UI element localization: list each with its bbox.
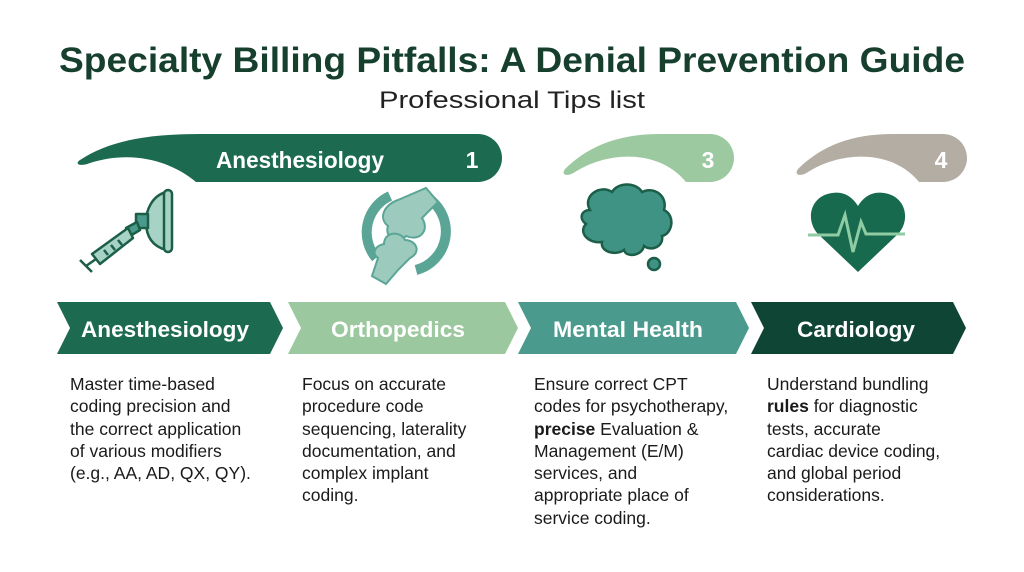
arrow: Cardiology xyxy=(751,302,966,354)
icon: orthopedic joint xyxy=(367,188,446,284)
text: Cardiology tip xyxy=(767,374,940,505)
arrow: Anesthesiology xyxy=(57,302,283,354)
text: Orthopedics tip xyxy=(302,374,467,505)
text: Cardiology tip: cardiac device coding, xyxy=(767,441,940,461)
text: Anesthesiology tip: the correct application xyxy=(70,419,241,439)
banner 4 xyxy=(797,134,967,182)
text: Anesthesiology tip: (e.g., AA, AD, QX, QY). xyxy=(70,463,251,483)
arrow: Mental Health xyxy=(518,302,749,354)
text: Orthopedics tip: procedure code xyxy=(302,396,424,416)
banner 3: 3 xyxy=(702,147,714,173)
arrow: Orthopedics xyxy=(288,302,518,354)
text: Mental Health tip: appropriate place of xyxy=(534,485,689,505)
arrow: Mental Health: Mental Health xyxy=(553,317,703,342)
banner 4: 4 xyxy=(935,147,948,173)
text: Mental Health tip: Ensure correct CPT xyxy=(534,374,688,394)
text: Cardiology tip: considerations. xyxy=(767,485,885,505)
text: Orthopedics tip: Focus on accurate xyxy=(302,374,446,394)
text: Anesthesiology tip: coding precision and xyxy=(70,396,231,416)
text: Anesthesiology tip xyxy=(70,374,251,483)
text: Mental Health tip: service coding. xyxy=(534,508,651,528)
text: Orthopedics tip: documentation, and xyxy=(302,441,456,461)
text: Orthopedics tip: complex implant xyxy=(302,463,429,483)
banner 3 xyxy=(564,134,734,182)
arrow: Anesthesiology: Anesthesiology xyxy=(81,317,250,342)
icon: heart with pulse xyxy=(808,193,905,272)
text: Cardiology tip: Understand bundling xyxy=(767,374,929,394)
text: Orthopedics tip: sequencing, laterality xyxy=(302,419,467,439)
text: Mental Health tip xyxy=(534,374,728,528)
banner 1: Anesthesiology xyxy=(78,134,502,182)
icon: anesthesia mask syringe xyxy=(80,190,172,272)
text: Cardiology tip: and global period xyxy=(767,463,901,483)
text: Orthopedics tip: coding. xyxy=(302,485,358,505)
text: Cardiology tip: rules for diagnostic xyxy=(767,396,918,416)
text: Anesthesiology tip: of various modifiers xyxy=(70,441,222,461)
text: Mental Health tip: precise Evaluation & xyxy=(534,419,699,439)
banner 1: Anesthesiology: 1 xyxy=(466,147,479,173)
text: Cardiology tip: tests, accurate xyxy=(767,419,881,439)
text: Mental Health tip: services, and xyxy=(534,463,637,483)
subtitle: Professional Tips list xyxy=(379,87,645,114)
text: Anesthesiology tip: Master time-based xyxy=(70,374,215,394)
text: Mental Health tip: codes for psychotherapy, xyxy=(534,396,728,416)
title: Specialty Billing Pitfalls: A Denial Prevention Guide xyxy=(59,41,965,80)
arrow: Orthopedics: Orthopedics xyxy=(331,317,465,342)
banner 1: Anesthesiology: Anesthesiology xyxy=(216,147,384,173)
arrow: Cardiology: Cardiology xyxy=(797,317,916,342)
icon: brain thought cloud xyxy=(582,184,671,270)
text: Mental Health tip: Management (E/M) xyxy=(534,441,684,461)
